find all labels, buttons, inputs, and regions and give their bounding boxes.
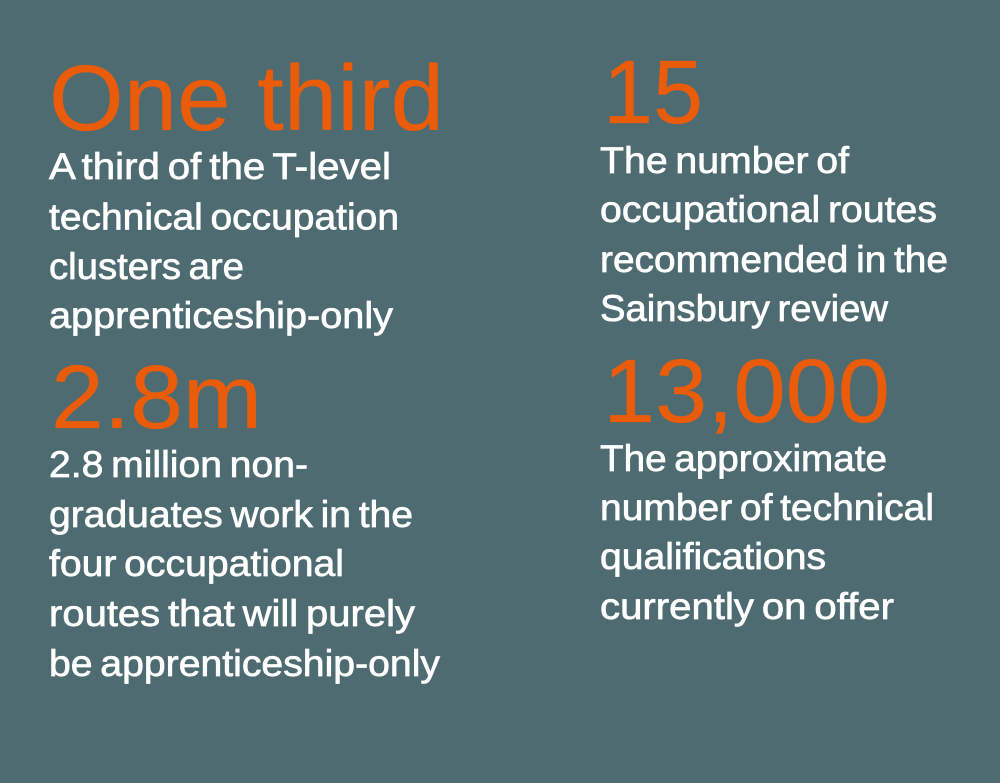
text block: 15 description: Sainsbury review: [600, 288, 888, 329]
text block: 2.8m description: routes that will purely: [49, 593, 416, 634]
text block: 13,000 description: The approximate: [600, 438, 887, 479]
text block: 15 description: [600, 140, 948, 329]
text block: 2.8m description: four occupational: [49, 543, 344, 584]
text block: 15 description: The number of: [600, 140, 850, 181]
text block: 2.8m description: 2.8 million non-: [49, 444, 308, 485]
text block: one third description: clusters are: [49, 246, 244, 287]
text block: one third description: [49, 146, 399, 336]
stat heading: 13,000: 13,000: [603, 342, 890, 442]
text block: 15 description: recommended in the: [600, 239, 948, 280]
text block: 13,000 description: currently on offer: [600, 586, 894, 627]
text block: one third description: technical occupation: [49, 196, 399, 238]
text block: 2.8m description: [49, 444, 441, 684]
text block: 2.8m description: graduates work in the: [49, 494, 413, 535]
text block: one third description: apprenticeship-only: [49, 295, 394, 336]
text block: 13,000 description: [600, 438, 934, 627]
text block: 15 description: occupational routes: [600, 189, 937, 230]
text block: one third description: A third of the T-level: [49, 146, 391, 187]
text block: 13,000 description: number of technical: [600, 487, 934, 528]
stat heading: One third: One third: [49, 46, 444, 150]
text block: 13,000 description: qualifications: [600, 536, 826, 577]
stat heading: 2.8m: 2.8m: [51, 348, 262, 448]
text block: 2.8m description: be apprenticeship-only: [49, 643, 441, 684]
stat heading: 15: 15: [603, 43, 703, 143]
